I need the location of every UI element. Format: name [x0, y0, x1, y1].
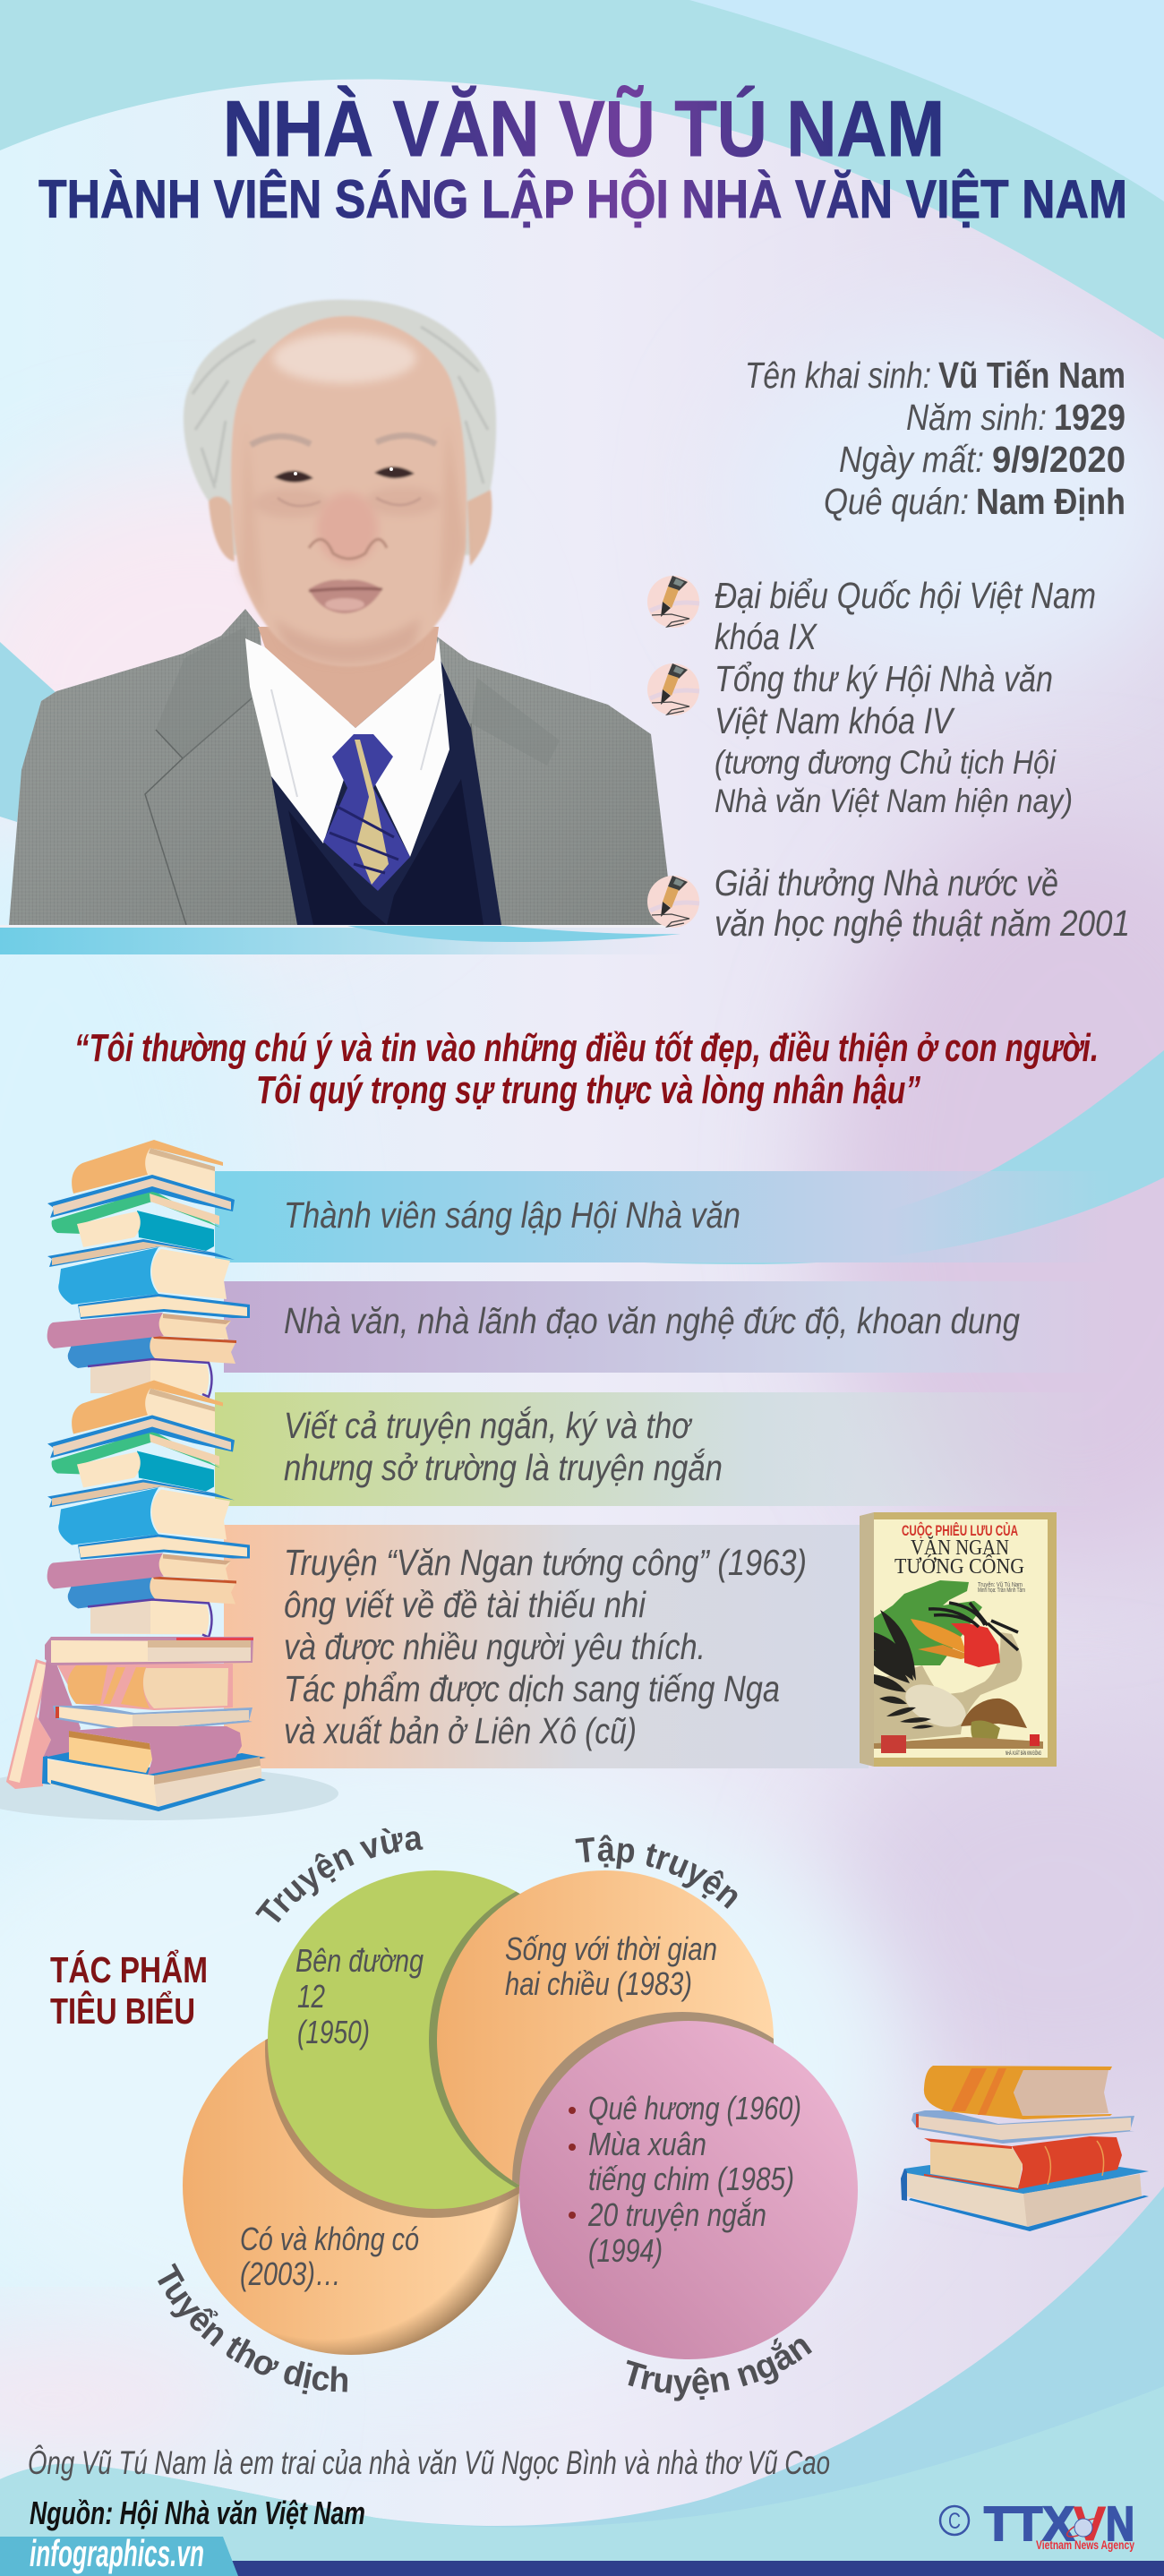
band 3 [215, 1392, 1110, 1506]
venn text: short stories: (1994) [588, 2232, 663, 2269]
band text 4: và xuất bản ở Liên Xô (cũ) [284, 1710, 637, 1751]
personal details: 9/9/2020 [992, 439, 1125, 480]
curved label: Tập truyện: Tập truyện [575, 1835, 738, 1909]
book cover: Văn Ngan tướng công: VĂN NGAN [911, 1536, 1009, 1560]
venn text: short stories: Mùa xuân [588, 2126, 706, 2162]
venn text: novella: 12 [297, 1978, 325, 2015]
book cover: Văn Ngan tướng công: TƯỚNG CÔNG [894, 1554, 1024, 1579]
stack shadow [0, 1767, 338, 1820]
venn text: novella: Bên đường [295, 1942, 424, 1979]
venn text: short stories: 20 truyện ngắn [587, 2196, 766, 2233]
logo: TTXVN: C [948, 2509, 961, 2534]
band text 4: và được nhiều người yêu thích. [284, 1626, 706, 1667]
book cover: Văn Ngan tướng công: Truyện: Vũ Tú Nam [978, 1582, 1023, 1588]
bottom teal swoosh [0, 2187, 1164, 2576]
footer bar [0, 2561, 1164, 2576]
icon: pen 3 [647, 876, 699, 928]
band 4 [224, 1525, 869, 1768]
venn: novella circle [268, 1870, 520, 2209]
band text 4: Truyện “Văn Ngan tướng công” (1963) [284, 1542, 807, 1583]
venn heading: TIÊU BIỂU [50, 1990, 195, 2032]
venn text: translated poetry: (2003)… [240, 2255, 341, 2292]
source: Nguồn: Hội Nhà văn Việt Nam [30, 2495, 365, 2531]
venn text: collection [505, 1930, 717, 2002]
footer tab [0, 2532, 238, 2576]
venn text: novella: (1950) [297, 2014, 370, 2050]
achievements list: Đại biểu Quốc hội Việt Nam [715, 575, 1096, 616]
quote [74, 1026, 1099, 1112]
quote: Tôi quý trọng sự trung thực và lòng nhân hậu” [256, 1068, 920, 1112]
achievements list: khóa IX [715, 616, 817, 657]
curved label: Tuyển thơ dịch: Tuyển thơ dịch [158, 2263, 347, 2394]
achievements list: (tương đương Chủ tịch Hội [715, 744, 1057, 781]
book cover: Văn Ngan tướng công [860, 1512, 1057, 1767]
book cover: Văn Ngan tướng công: CUỘC PHIÊU LƯU CỦA [902, 1522, 1018, 1539]
right books illustration [901, 2066, 1149, 2231]
personal details: 1929 [1054, 397, 1125, 438]
personal details: Ngày mất: [839, 439, 984, 480]
bottom books [6, 1637, 266, 1811]
band text 4: Tác phẩm được dịch sang tiếng Nga [284, 1668, 780, 1709]
band text 4 [284, 1542, 807, 1751]
venn: translated poetry circle [183, 2038, 519, 2355]
logo: TTXVN: V [1074, 2497, 1106, 2551]
achievements list: Giải thưởng Nhà nước về [715, 862, 1058, 903]
band under portrait [0, 925, 707, 954]
book stack [0, 1140, 338, 1820]
curved label: Truyện vừa: Truyện vừa [255, 1828, 423, 1923]
personal details: Năm sinh: [906, 397, 1047, 438]
band text 3: nhưng sở trường là truyện ngắn [284, 1447, 723, 1488]
left teal accent behind portrait [0, 642, 56, 822]
venn heading [50, 1948, 208, 2032]
portrait photo [9, 300, 668, 925]
venn: collection circle [437, 1870, 774, 2185]
band text 3: Viết cả truyện ngắn, ký và thơ [284, 1405, 693, 1446]
personal details: Tên khai sinh: [745, 355, 931, 396]
venn text: collection: hai chiều (1983) [505, 1965, 692, 2002]
personal details [745, 355, 1125, 522]
curved label: Truyện ngắn: Truyện ngắn [627, 2337, 812, 2401]
top teal swoosh [0, 0, 1164, 339]
footer tab: infographics.vn [30, 2532, 204, 2574]
venn text: collection: Sống với thời gian [505, 1930, 717, 1967]
band 1 [215, 1171, 1110, 1262]
venn text: short stories [569, 2090, 801, 2269]
venn text: translated poetry [240, 2221, 419, 2292]
venn text: short stories: tiếng chim (1985) [588, 2161, 794, 2197]
venn: short story circle [519, 2021, 858, 2359]
achievements list: Nhà văn Việt Nam hiện nay) [715, 783, 1073, 819]
personal details: Vũ Tiến Nam [938, 355, 1125, 396]
venn text: translated poetry: Có và không có [240, 2221, 419, 2257]
venn text: novella [295, 1942, 424, 2050]
icon: pen 1 [647, 576, 699, 628]
logo: TTXVN: TTX [984, 2497, 1074, 2551]
title [39, 84, 1127, 229]
band text 3 [284, 1405, 723, 1488]
band 2 [224, 1281, 1119, 1373]
right teal swoosh [550, 1050, 1164, 1264]
achievements list [715, 575, 1130, 944]
logo: TTXVN: N [1106, 2497, 1134, 2551]
icon: pen 2 [647, 663, 699, 715]
book cover: Văn Ngan tướng công: NHÀ XUẤT BẢN KIM ĐỒNG [1006, 1750, 1041, 1757]
band text 4: ông viết về đề tài thiếu nhi [284, 1584, 647, 1625]
band text 2: Nhà văn, nhà lãnh đạo văn nghệ đức độ, khoan dung [284, 1300, 1020, 1341]
logo: TTXVN [940, 2497, 1134, 2552]
book cover: Văn Ngan tướng công: Minh họa: Trần Minh Tâm [978, 1586, 1025, 1594]
personal details: Nam Định [976, 481, 1125, 522]
personal details: Quê quán: [824, 481, 969, 522]
note: Ông Vũ Tú Nam là em trai của nhà văn Vũ Ngọc Bình và nhà thơ Vũ Cao [28, 2444, 830, 2481]
achievements list: Việt Nam khóa IV [715, 700, 955, 741]
title: NHÀ VĂN VŨ TÚ NAM [223, 84, 945, 173]
achievements list: Tổng thư ký Hội Nhà văn [715, 658, 1053, 699]
venn heading: TÁC PHẨM [50, 1948, 208, 1990]
venn text: short stories: Quê hương (1960) [588, 2090, 801, 2127]
band text 1: Thành viên sáng lập Hội Nhà văn [284, 1194, 740, 1236]
